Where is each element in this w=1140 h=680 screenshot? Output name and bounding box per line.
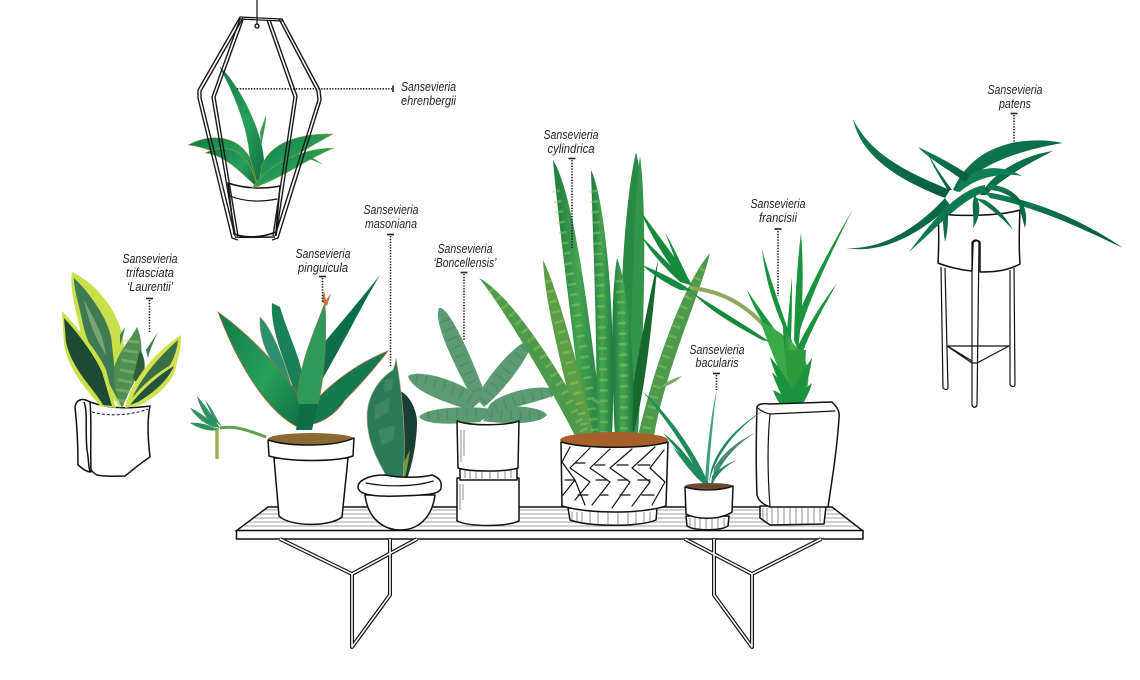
- label: trifasciata: trifasciata: [126, 265, 174, 280]
- label: cylindrica: cylindrica: [548, 141, 594, 156]
- leaves: [367, 358, 417, 488]
- label: pinguicula: Sansevieria: [296, 246, 350, 261]
- leaves: [218, 275, 388, 430]
- square planter: [756, 402, 839, 525]
- label: ehrenbergii: ehrenbergii: [401, 93, 457, 108]
- label: patens: [988, 82, 1042, 144]
- leaves: [408, 308, 559, 424]
- fabric bag: [75, 400, 150, 476]
- plant: Sansevieria pinguicula: [190, 275, 388, 524]
- hanging pot: [228, 183, 280, 237]
- plant: Sansevieria masoniana: [358, 358, 441, 530]
- leaves: [62, 272, 181, 408]
- soil: [773, 403, 837, 411]
- label: bacularis: bacularis: [696, 355, 739, 370]
- label: masoniana: Sansevieria: [364, 202, 418, 217]
- leaves: [846, 119, 1123, 252]
- soil: [268, 433, 354, 445]
- plant: Sansevieria cylindrica: [479, 152, 710, 526]
- leaves: [643, 388, 773, 487]
- hanging wire: [240, 0, 282, 24]
- label: pinguicula: pinguicula: [297, 260, 348, 275]
- stacked pot: [457, 421, 519, 526]
- patterned pot: [561, 442, 668, 526]
- plant: Sansevieria bacularis: [643, 388, 773, 530]
- leaves: [747, 209, 853, 408]
- label: cylindrica: Sansevieria: [544, 127, 598, 142]
- wire frame: [198, 17, 321, 240]
- plant: Sansevieria francisii: [640, 209, 853, 525]
- label: francisii: Sansevieria: [750, 196, 806, 211]
- label: Boncellensis: ‘Boncellensis’: [434, 255, 497, 270]
- label: trifasciata: ‘Laurentii’: [127, 279, 174, 294]
- plant: Sansevieria Boncellensis: [408, 308, 559, 526]
- hanging pot rim line: [230, 196, 277, 201]
- leaves: [479, 152, 710, 442]
- label: francisii: francisii: [759, 210, 798, 225]
- label: masoniana: [364, 202, 418, 367]
- label: trifasciata: Sansevieria: [122, 251, 178, 266]
- bowl: [358, 475, 441, 530]
- left table leg: [280, 539, 417, 647]
- offshoot: [640, 210, 772, 342]
- right table leg: [685, 539, 821, 647]
- label: masoniana: masoniana: [365, 216, 417, 231]
- small pot: [685, 486, 733, 530]
- table top: [236, 507, 863, 539]
- plant: Sansevieria patens: [846, 119, 1123, 407]
- label: cylindrica: [544, 127, 598, 248]
- left table leg highlight: [280, 539, 417, 647]
- label: patens: Sansevieria: [988, 82, 1042, 97]
- plant: Sansevieria trifasciata Laurentii: [62, 272, 181, 476]
- label: Boncellensis: Sansevieria: [438, 241, 492, 256]
- stand legs: [941, 240, 1015, 407]
- label: Boncellensis: [434, 241, 497, 340]
- round pot on stand: [938, 210, 1020, 272]
- offshoot: [190, 396, 266, 459]
- leaves: [188, 66, 334, 188]
- right table leg highlight: [685, 539, 821, 647]
- label: ehrenbergii: [237, 79, 457, 108]
- soil: [560, 432, 668, 448]
- table: [236, 507, 863, 647]
- label: bacularis: [690, 342, 744, 390]
- pot: [268, 438, 354, 524]
- plant: Sansevieria ehrenbergii: [188, 0, 334, 240]
- label: ehrenbergii: Sansevieria: [401, 79, 456, 94]
- label: pinguicula: [296, 246, 350, 302]
- soil: [685, 483, 733, 489]
- label: francisii: [750, 196, 806, 296]
- label: trifasciata: [122, 251, 178, 332]
- label: patens: patens: [998, 96, 1031, 111]
- label: bacularis: Sansevieria: [690, 342, 744, 357]
